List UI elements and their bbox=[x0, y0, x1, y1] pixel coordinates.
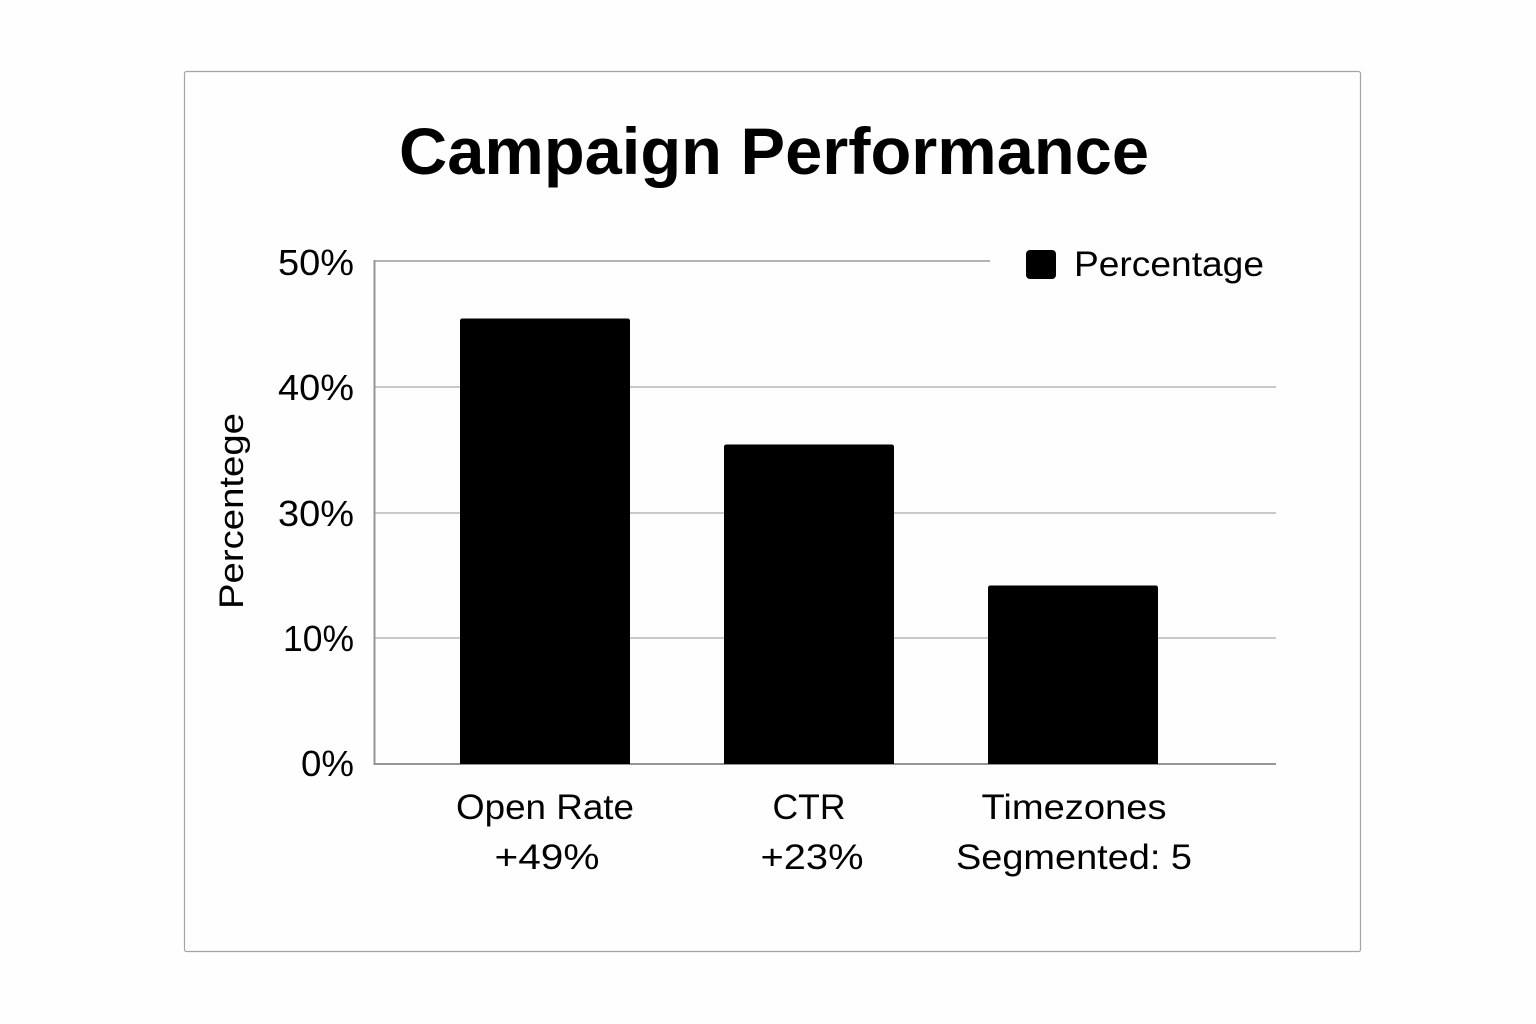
x axis label: CTR: +23% bbox=[760, 838, 864, 877]
x axis label: Timezones Segmented: Timezones bbox=[982, 788, 1166, 827]
title: Campaign Performance bbox=[399, 114, 1149, 188]
x axis label: Timezones Segmented bbox=[956, 788, 1192, 877]
y axis tick labels: 0% bbox=[301, 743, 354, 784]
y axis tick labels: 30% bbox=[278, 493, 354, 534]
y axis tick labels: 50% bbox=[278, 242, 354, 283]
y axis tick labels: 10% bbox=[283, 618, 354, 659]
bar: CTR bbox=[724, 444, 894, 764]
legend: Percentage bbox=[1074, 245, 1264, 284]
x axis label: Open Rate: +49% bbox=[494, 838, 600, 877]
bar: Open Rate bbox=[460, 318, 630, 764]
x axis label: Open Rate: Open Rate bbox=[456, 788, 634, 827]
x axis label: Timezones Segmented: Segmented: 5 bbox=[956, 838, 1192, 877]
bar chart bbox=[460, 318, 1158, 764]
gridlines and axes bbox=[374, 260, 1276, 765]
x axis label: CTR: CTR bbox=[772, 788, 846, 827]
x axis label: Open Rate bbox=[456, 788, 634, 877]
y axis tick labels: 40% bbox=[278, 367, 354, 408]
bar: Timezones Segmented bbox=[988, 586, 1158, 764]
y axis title: Percentege bbox=[213, 413, 251, 609]
panel: chart card bbox=[184, 72, 1360, 952]
x axis label: CTR bbox=[760, 788, 864, 877]
y axis tick labels bbox=[278, 242, 354, 784]
